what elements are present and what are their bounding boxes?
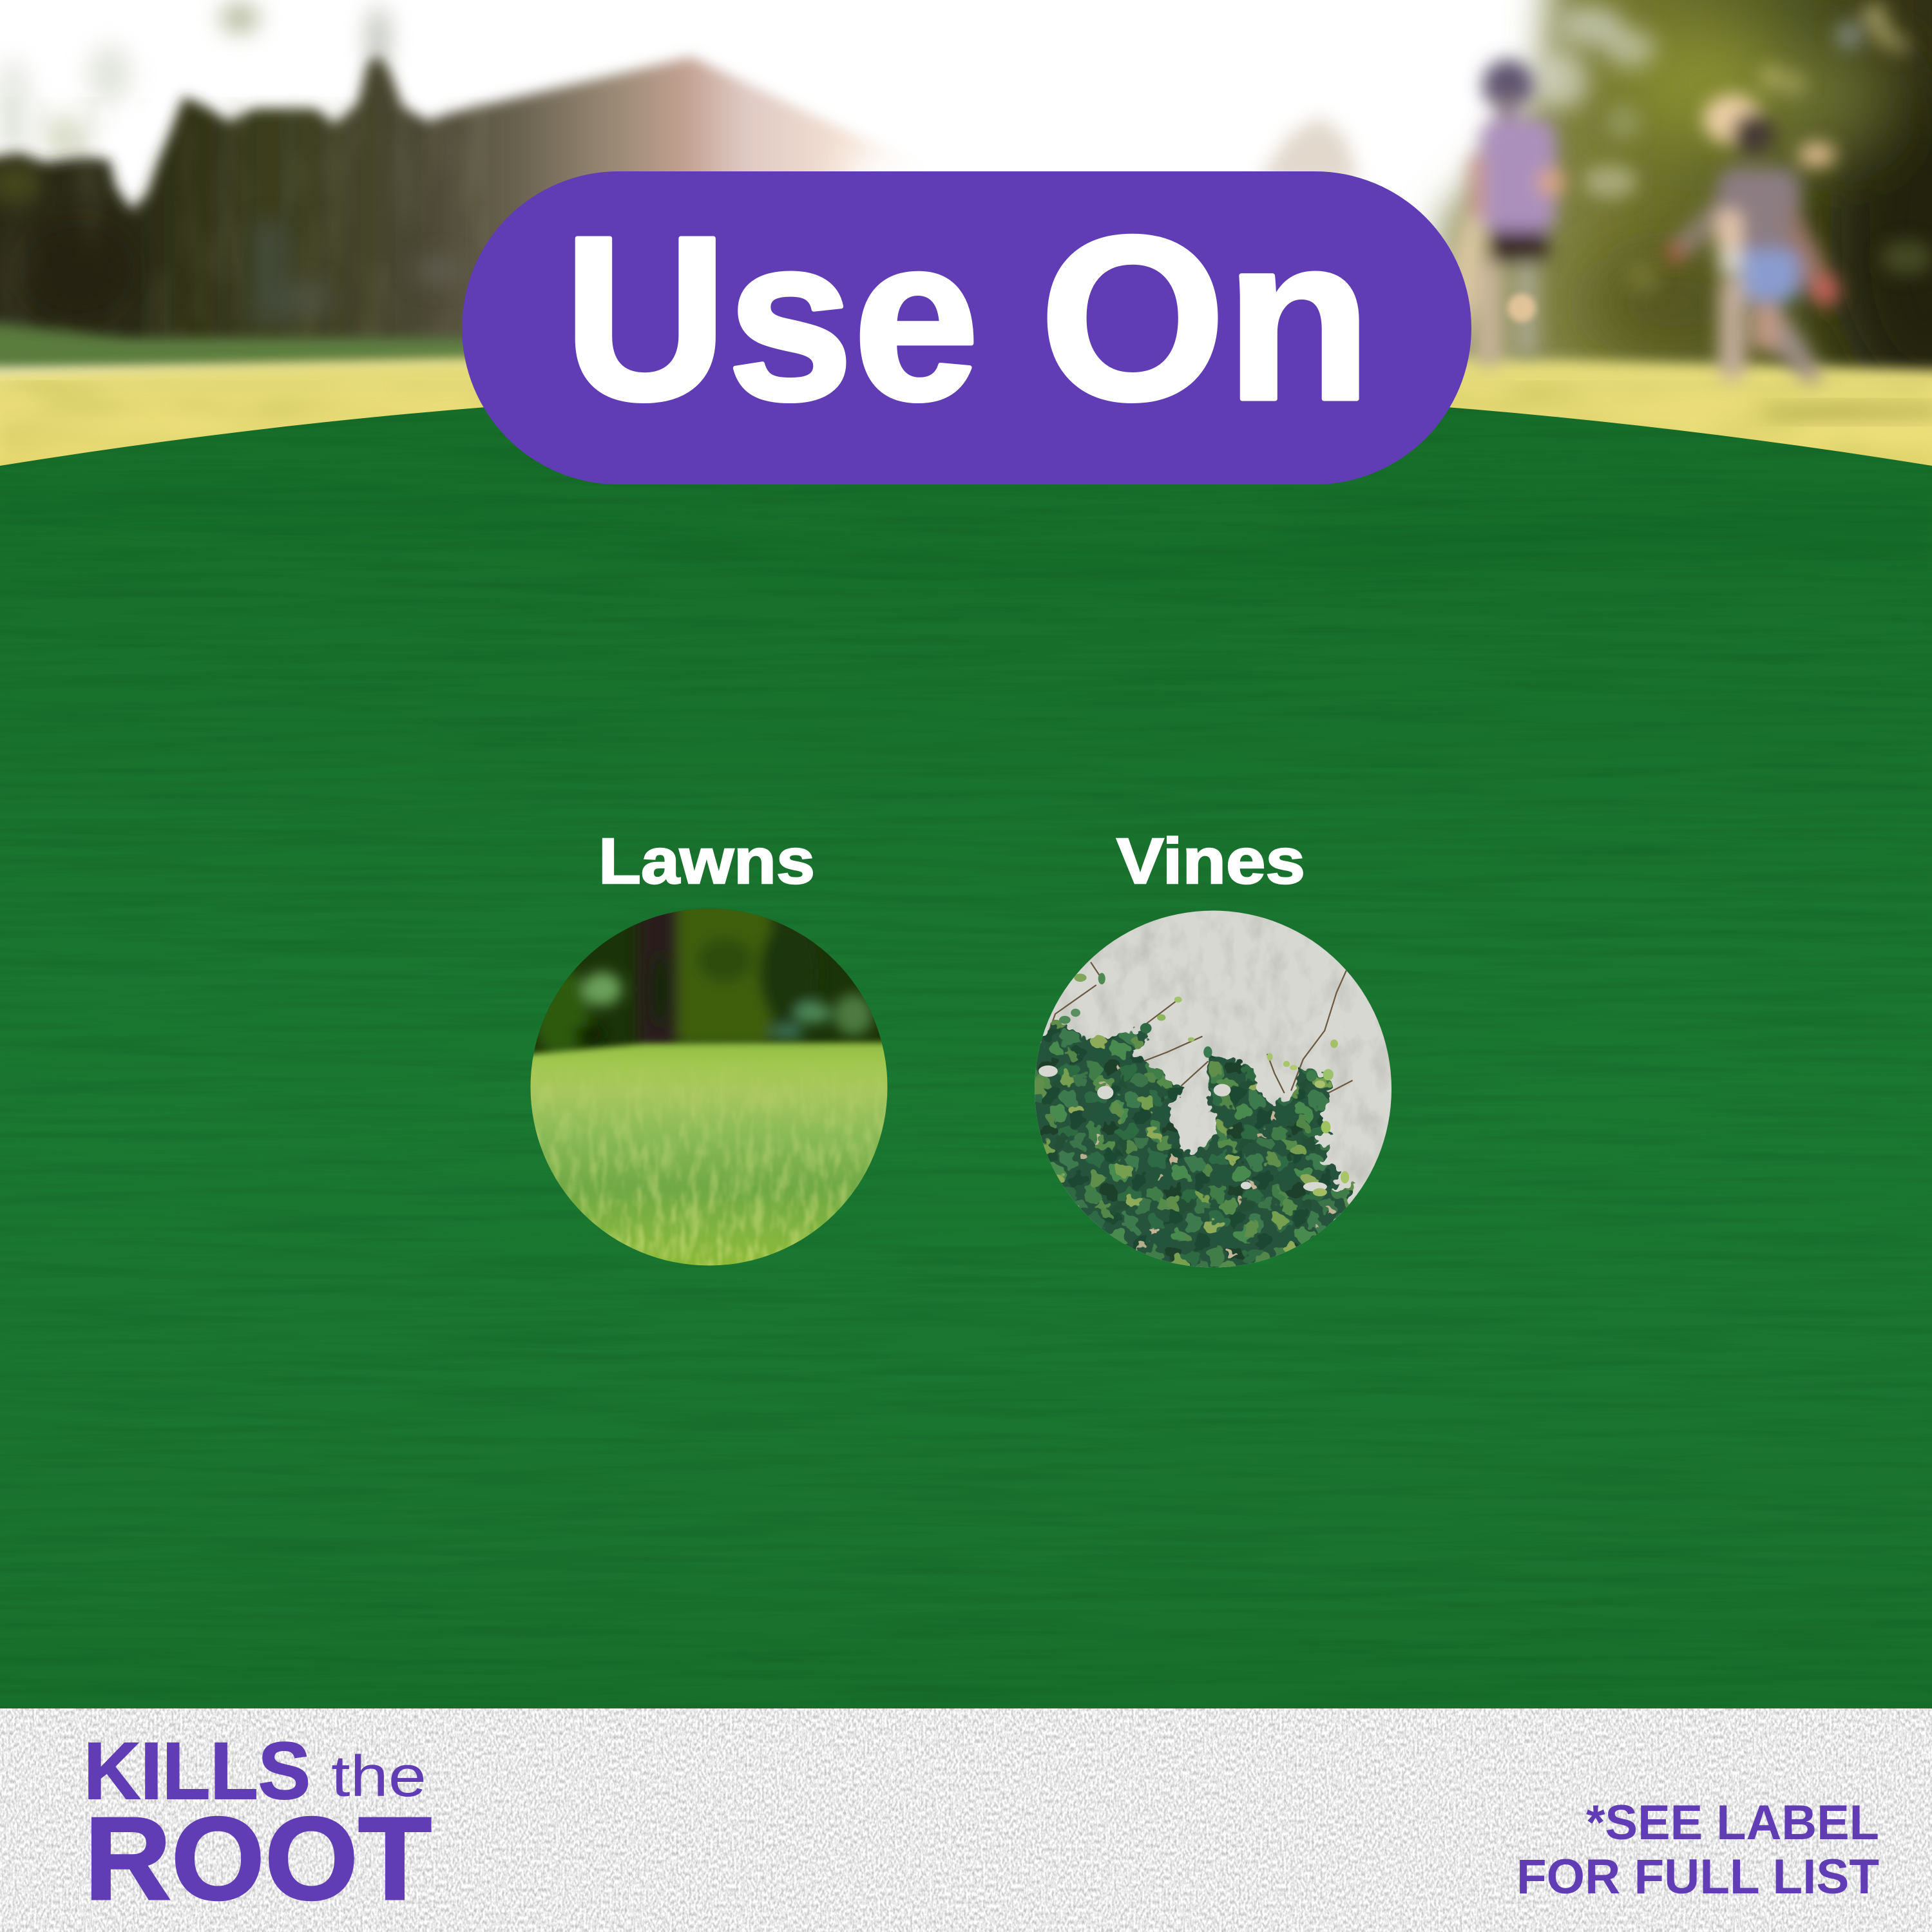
photo circle: vines on wall xyxy=(1024,907,1395,1283)
green textured wood panel xyxy=(0,388,1932,1708)
grass noise layer xyxy=(528,1057,890,1269)
distant tree behind the pill xyxy=(1256,116,1359,184)
branches xyxy=(1046,962,1352,1097)
pale sky showing through the leaves xyxy=(1535,5,1656,110)
title: Use On: Use xyxy=(564,187,979,448)
pill background xyxy=(462,171,1471,484)
lighter and dried leaves xyxy=(1024,1017,1354,1283)
footer stucco texture xyxy=(0,1708,1932,1932)
faint distant foliage on the left xyxy=(0,4,388,164)
right side light and shade xyxy=(1585,26,1932,412)
large trees on the right xyxy=(1437,0,1932,399)
plaster mottling xyxy=(1031,907,1395,1272)
wood grain texture xyxy=(0,388,1932,1708)
bluish highlights in the trees xyxy=(0,164,464,329)
running adult xyxy=(1437,59,1565,367)
heading: Lawns: Lawns xyxy=(598,825,815,897)
tree line and house as one continuous silhouette xyxy=(0,55,992,351)
grass gradient xyxy=(502,1042,915,1295)
the: the xyxy=(331,1745,426,1809)
base mass of dark leaves xyxy=(1024,1017,1354,1283)
sunlit grass xyxy=(0,351,1932,528)
white textured wall footer xyxy=(0,1708,1932,1932)
background photo: family yard with children running xyxy=(0,0,1932,466)
glow of the sun beside the house xyxy=(844,139,1063,216)
left lawn shade band xyxy=(0,319,490,370)
logo: Kills the Root xyxy=(84,1726,432,1924)
blurred garden trees and shrubs xyxy=(532,876,873,1057)
individual sprig leaves xyxy=(1059,973,1349,1196)
title: Use On xyxy=(564,187,1372,448)
running child xyxy=(1667,95,1839,383)
green panel fill xyxy=(0,388,1932,1708)
plaster wall xyxy=(1031,907,1395,1272)
footnote line 1: *SEE LABEL xyxy=(1586,1795,1879,1850)
purple pill header xyxy=(462,171,1471,484)
ROOT: ROOT xyxy=(84,1792,432,1924)
grass blade texture xyxy=(528,1057,890,1269)
leaf mass with irregular edge xyxy=(1024,1017,1354,1283)
wall gaps between the leaves xyxy=(1038,1066,1327,1192)
footnote: see label for full list xyxy=(1516,1795,1879,1904)
shadow on the right grass xyxy=(1759,403,1932,421)
heading: Vines: Vines xyxy=(1116,825,1305,897)
KILLS: KILLS xyxy=(84,1726,311,1816)
photo circle: lawn xyxy=(502,876,915,1295)
darker wave near top of panel xyxy=(0,486,1932,580)
title: Use On: On xyxy=(1040,187,1372,448)
vertical tone variation in the trees xyxy=(0,97,490,341)
mottled grass tone xyxy=(0,380,1932,502)
sky xyxy=(0,0,1932,502)
vine foliage drawn in zoomed local coordinates xyxy=(1024,962,1354,1283)
footnote line 2: FOR FULL LIST xyxy=(1516,1850,1879,1904)
bokeh lights xyxy=(1583,3,1932,292)
dark tree backdrop xyxy=(515,889,903,1057)
bright spot by adult's knee xyxy=(1507,294,1536,322)
